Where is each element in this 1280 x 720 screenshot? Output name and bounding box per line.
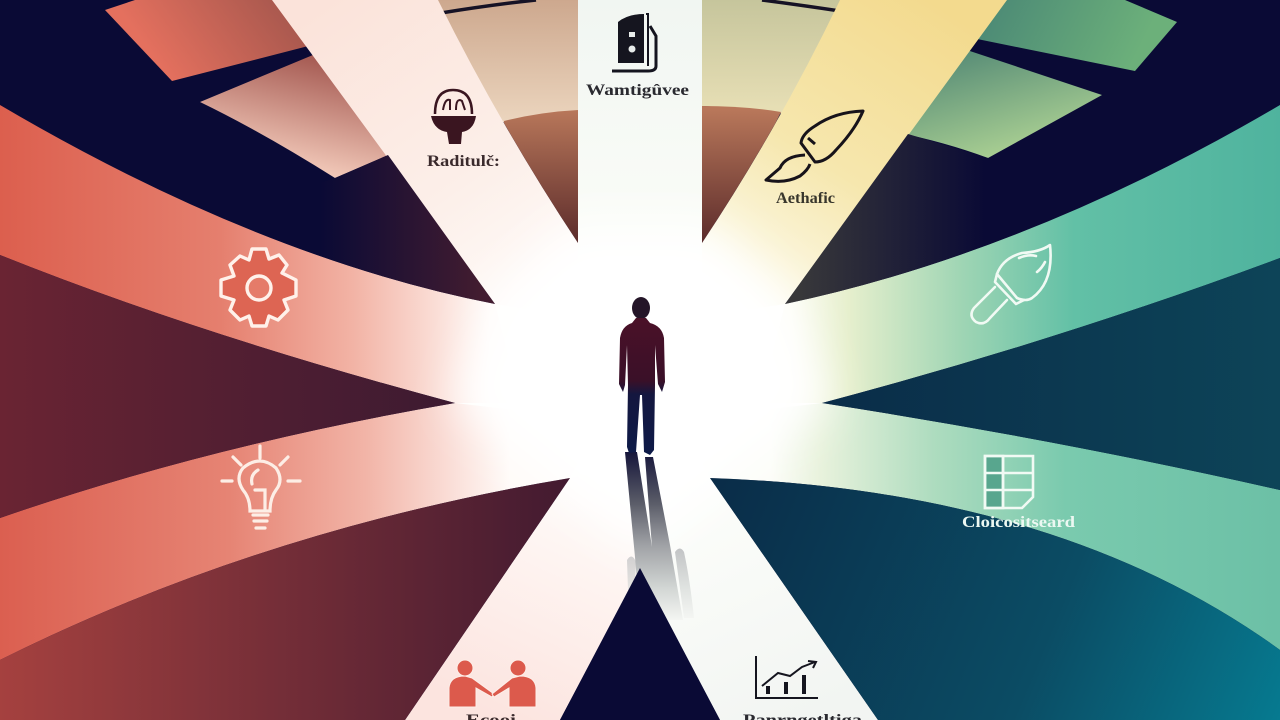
icon: book — [612, 14, 656, 71]
icon: book and label — [586, 14, 689, 99]
panel: dark wedge left — [0, 255, 455, 518]
panel: tan arc left — [430, 0, 578, 124]
label: upper left: Raditulč: — [427, 153, 500, 170]
icon: brain bowl and label — [427, 90, 500, 170]
label: top centre: Wamtigûvee — [586, 82, 689, 99]
panel: upper right ray — [680, 0, 1007, 320]
figure: person — [619, 297, 665, 455]
label: upper right: Aethafic — [776, 190, 835, 207]
icon: teal brush — [971, 245, 1051, 323]
panel: lower left red band — [0, 403, 600, 660]
panel: second top-left band — [200, 50, 400, 178]
icon: table and label — [962, 456, 1075, 531]
arc line right — [762, 0, 840, 11]
panel: lower left ray — [405, 460, 660, 720]
icon: brain bowl — [431, 90, 476, 144]
panel: upper left ray — [272, 0, 600, 320]
icon: gear — [221, 249, 296, 326]
panel: lower right teal band — [680, 403, 1280, 650]
panel: tan arc right — [702, 0, 850, 114]
icon: growth chart and label — [743, 656, 862, 720]
panel: top-right green band — [960, 0, 1177, 71]
panel: second top-right band — [895, 48, 1102, 158]
icon: paint brush — [766, 111, 863, 181]
panel: top-left salmon band — [105, 0, 320, 81]
bottom centre triangle — [560, 568, 720, 720]
panel: brown arc right — [702, 106, 781, 243]
panel: dark wedge lower right — [710, 478, 1280, 720]
figure shadow — [625, 452, 694, 620]
icon: paint brush and label — [766, 111, 863, 207]
icon: handshake people and label — [449, 660, 536, 720]
panel: dark wedge right — [822, 258, 1280, 490]
icon: table — [985, 456, 1033, 508]
central white base — [455, 243, 822, 570]
central white glow — [455, 225, 830, 550]
panel: dark wedge lower left — [0, 478, 570, 720]
icon: people — [449, 660, 536, 707]
panel: centre ray — [578, 0, 702, 320]
panel: brown arc left — [504, 110, 578, 243]
panel: upper right teal band — [760, 105, 1280, 403]
panel: upper left red band — [0, 105, 520, 403]
panel: dark wedge upper left — [254, 155, 495, 304]
label: right: Cloicositseard — [962, 514, 1075, 531]
panel: dark wedge upper right — [785, 134, 1031, 304]
arc line left — [441, 0, 536, 13]
icon: chart — [756, 656, 818, 698]
icon: light bulb — [222, 446, 300, 528]
panel: lower right ray — [620, 460, 878, 720]
